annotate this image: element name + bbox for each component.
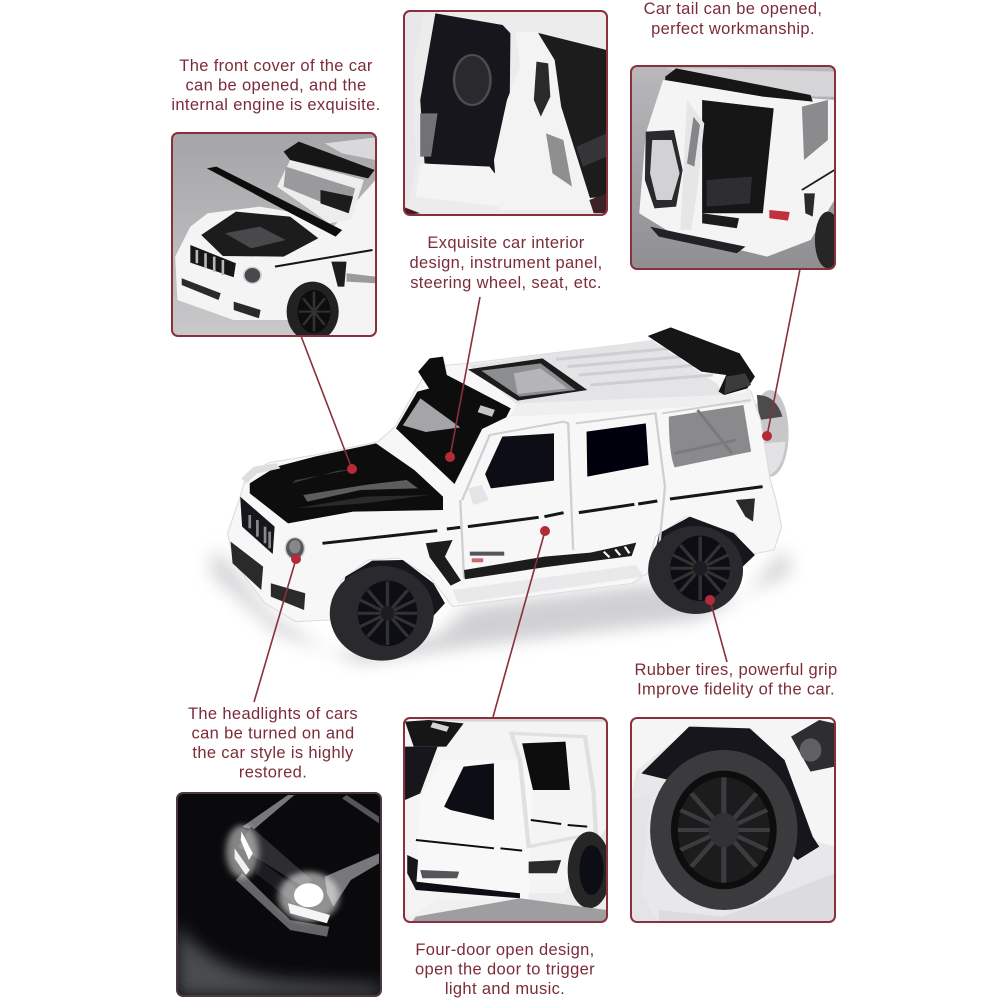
headlight (285, 538, 304, 559)
sunroof (468, 358, 587, 401)
side sill (453, 565, 644, 603)
door mirror (468, 485, 489, 505)
text: doors: open the door to trigger (415, 960, 595, 978)
rear spoiler (648, 327, 755, 395)
text: front cover: can be opened, and the (185, 76, 367, 94)
panel border (404, 11, 607, 215)
text: tail: perfect workmanship. (651, 20, 815, 38)
panel border (172, 133, 376, 336)
panel border (631, 66, 835, 269)
rear door window (587, 423, 649, 477)
panel: headlights lit (177, 793, 381, 996)
panel border (177, 793, 381, 996)
text: front cover: The front cover of the car (179, 57, 373, 75)
callout line: interior (445, 297, 480, 462)
car body (228, 340, 782, 622)
main car illustration (211, 327, 789, 663)
text: headlights: The headlights of cars (188, 705, 358, 723)
side graphic (464, 543, 636, 579)
callout line: doors (493, 526, 550, 717)
text: doors: light and music. (445, 980, 565, 998)
text: tail: Car tail can be opened, (644, 0, 822, 18)
callout line: tire (705, 595, 727, 662)
text: tires: Improve fidelity of the car. (637, 680, 835, 698)
panel: four doors open (403, 718, 611, 922)
front visor (418, 357, 511, 429)
belt stripes (322, 487, 763, 543)
rear fender vent (736, 498, 755, 522)
panel border (404, 718, 607, 922)
text: headlights: the car style is highly (192, 744, 354, 762)
panel border (631, 718, 835, 922)
callout line: tail (762, 269, 800, 441)
panel: tire closeup (631, 718, 835, 922)
windshield (396, 388, 482, 484)
front bull bar (241, 463, 280, 483)
text: tires: Rubber tires, powerful grip (635, 661, 837, 679)
hood (250, 443, 443, 523)
text: doors: Four-door open design, (415, 941, 595, 959)
roof (468, 340, 724, 405)
callout line: hood (301, 336, 357, 474)
text: headlights: can be turned on and (192, 724, 354, 742)
spare wheel (752, 390, 789, 477)
door seams (460, 400, 751, 578)
rear side window (669, 405, 751, 467)
upper body shade (510, 392, 751, 417)
wheel arches (338, 517, 755, 637)
panel: front cover opened (172, 133, 376, 342)
front bumper vents (231, 542, 305, 610)
panel: car interior (403, 11, 607, 215)
front door window (485, 433, 554, 488)
text: interior: steering wheel, seat, etc. (410, 274, 602, 292)
front wheel (330, 566, 434, 661)
text: front cover: internal engine is exquisite. (171, 96, 381, 114)
callout line: headlight (254, 554, 301, 702)
text: interior: design, instrument panel, (409, 254, 603, 272)
text: headlights: restored. (239, 764, 307, 782)
panel: tailgate opened (631, 66, 841, 269)
rear wheel (648, 526, 743, 614)
grille (240, 497, 275, 554)
front fender vent (426, 540, 461, 586)
car ground shadow (211, 547, 789, 663)
text: interior: Exquisite car interior (427, 234, 585, 252)
